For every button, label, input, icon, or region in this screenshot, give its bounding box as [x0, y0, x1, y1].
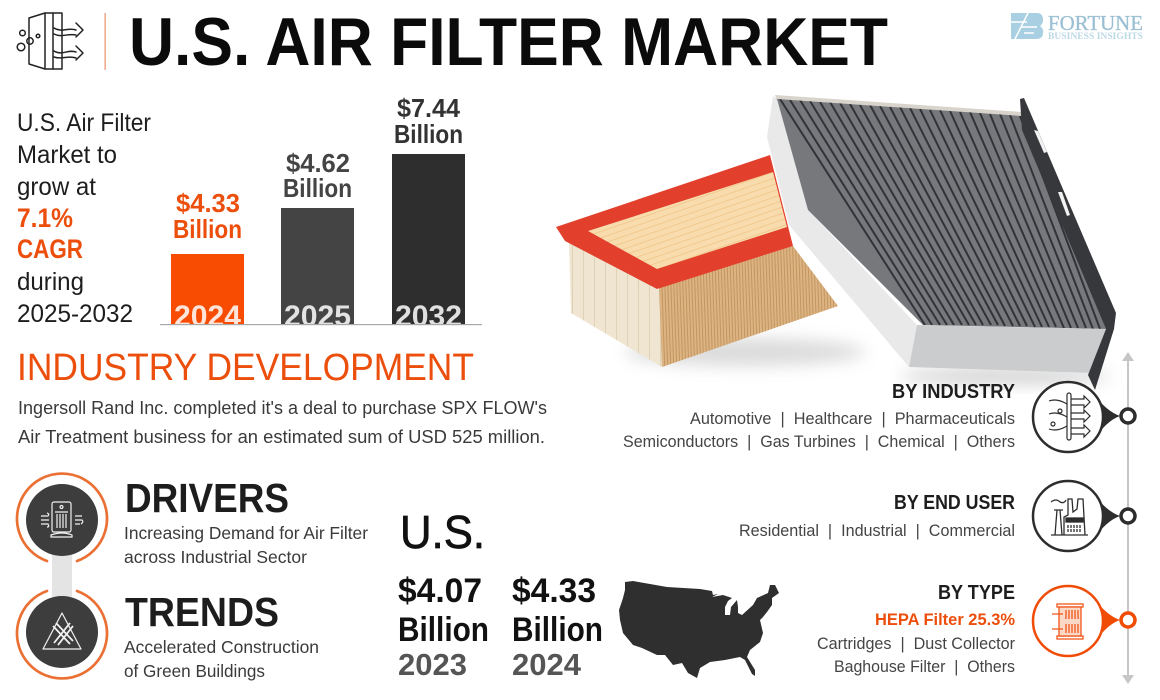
icon: trends warning tools	[17, 591, 107, 678]
text block: drivers: Increasing Demand for Air Filter	[124, 523, 368, 543]
bar chart: 2032	[395, 300, 462, 333]
connector: drivers to trends	[52, 552, 72, 600]
panel: by industry	[623, 381, 1016, 451]
panel: by type	[817, 582, 1015, 676]
bar chart: $4.62	[286, 148, 350, 178]
panel: by type: Baghouse Filter | Others	[834, 657, 1015, 676]
text block: development description: Ingersoll Rand Inc. completed it's a deal to purchase SPX FLOW's	[18, 397, 547, 418]
bar chart: Billion	[394, 119, 463, 149]
panel: by end user	[739, 492, 1015, 540]
bar chart: 2025	[284, 300, 351, 333]
text block: trends	[124, 589, 319, 681]
text block: market growth: CAGR	[17, 234, 83, 264]
bar chart: Billion	[283, 173, 352, 203]
carbon filter	[767, 95, 1116, 390]
heading: U.S.: U.S.	[400, 506, 485, 558]
text block: market growth: during	[17, 268, 84, 296]
orange filter	[556, 155, 838, 367]
text block: development description	[18, 397, 547, 447]
text block: trends: of Green Buildings	[124, 661, 265, 681]
text block: market growth: Market to	[17, 141, 117, 169]
panel: by type: HEPA Filter 25.3%	[875, 610, 1015, 629]
stat: 2023 value	[398, 572, 489, 682]
text block: market growth	[17, 109, 151, 328]
panel: by type: Cartridges | Dust Collector	[817, 634, 1015, 653]
icon: drivers air purifier	[17, 474, 107, 561]
stat: 2024 value: $4.33	[512, 572, 596, 610]
timeline axis	[1122, 352, 1134, 684]
map: United States	[619, 581, 779, 678]
panel: by industry: BY INDUSTRY	[892, 381, 1016, 403]
text block: market growth: 2025-2032	[17, 300, 133, 328]
text block: drivers: across Industrial Sector	[124, 547, 307, 567]
logo: Fortune Business Insights	[1011, 11, 1143, 42]
icon: industry air flow	[1033, 382, 1135, 452]
bar chart: 2024	[174, 300, 241, 333]
bar chart: $7.44	[397, 93, 461, 123]
bar chart	[160, 93, 482, 333]
stat: 2023 value: Billion	[398, 611, 489, 649]
panel: by type: BY TYPE	[938, 582, 1015, 604]
text block: drivers: DRIVERS	[125, 475, 289, 521]
stat: 2023 value: 2023	[398, 647, 467, 682]
heading: industry development: INDUSTRY DEVELOPMENT	[17, 347, 474, 389]
text block: market growth: grow at	[17, 173, 96, 201]
panel: by end user: BY END USER	[894, 492, 1015, 514]
stat: 2023 value: $4.07	[398, 572, 482, 610]
bar chart: $4.33	[176, 188, 240, 218]
text block: development description: Air Treatment business for an estimated sum of USD 525 million.	[18, 426, 545, 447]
icon: HEPA filter	[1033, 586, 1135, 656]
text block: market growth: 7.1%	[17, 203, 73, 233]
title: U.S. AIR FILTER MARKET	[129, 4, 888, 80]
stat: 2024 value: Billion	[512, 611, 603, 649]
text block: trends: TRENDS	[125, 589, 279, 635]
text block: market growth: U.S. Air Filter	[17, 109, 151, 137]
icon: factory	[1033, 481, 1135, 551]
panel: by end user: Residential | Industrial | Commercial	[739, 521, 1015, 540]
logo: Fortune Business Insights: FORTUNE	[1048, 11, 1143, 35]
bar chart: Billion	[173, 214, 242, 244]
stat: 2024 value	[512, 572, 603, 682]
stat: 2024 value: 2024	[512, 647, 582, 682]
icon: air filter with arrows	[17, 13, 83, 69]
text block: drivers	[124, 475, 368, 567]
panel: by industry: Semiconductors | Gas Turbines | Chemical | Others	[623, 432, 1015, 451]
text block: trends: Accelerated Construction	[124, 637, 319, 657]
logo: Fortune Business Insights: BUSINESS INSIGHTS	[1048, 32, 1143, 42]
image: air filters	[556, 95, 1116, 390]
panel: by industry: Automotive | Healthcare | Pharmaceuticals	[690, 409, 1015, 428]
